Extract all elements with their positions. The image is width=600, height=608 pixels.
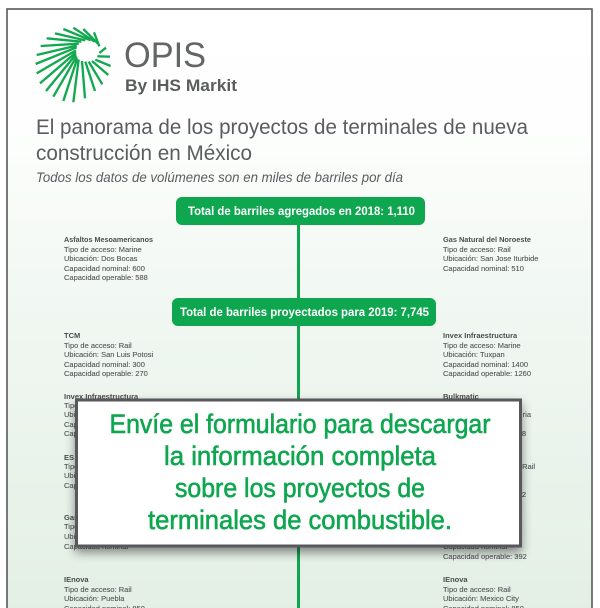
entry: IEnova Puebla: Tipo de acceso: Rail [64,585,132,594]
callout: download form message: Envíe el formulario para descargar [110,409,491,439]
entry: IEnova Mexico City: Tipo de acceso: Rail [443,585,511,594]
entry: Gas, partly covered [64,513,129,551]
callout: download form message [76,400,520,546]
entry: Invex Infraestructura Tuxpan: Tipo de acceso: Marine [443,341,521,350]
entry: Asfaltos Mesoamericanos: Tipo de acceso: Marine [64,245,142,254]
entry: right column middle, partly covered [522,462,535,499]
entry: right column middle, partly covered: 2 [522,490,526,499]
entry: ES, partly covered: Tipo [64,462,78,471]
callout: download form message: terminales de combustible. [148,505,452,535]
entry: right column lower, operable capacity: Capacidad nominal [443,542,508,551]
logo wordmark: OPIS: OPIS [124,36,206,75]
entry: Gas, partly covered: Ubicación [64,532,97,541]
entry: Bulkmatic, partly covered [443,392,532,438]
entry: IEnova Puebla: IEnova [64,575,89,584]
entry: Invex Infraestructura Tuxpan: Capacidad nominal: 1400 [443,360,528,369]
entry: Gas Natural del Noroeste: Capacidad nominal: 510 [443,264,524,273]
entry: Invex Infraestructura Tuxpan: Ubicación: Tuxpan [443,350,505,359]
entry: Invex Infraestructura, partly covered: Tipo [64,401,78,410]
entry: ES, partly covered: Capacidad [64,481,100,490]
title [36,116,528,165]
entry: Asfaltos Mesoamericanos: Asfaltos Mesoamericanos [64,235,153,244]
entry: IEnova Mexico City [443,575,524,608]
entry: Invex Infraestructura, partly covered: Invex Infraestructura [64,392,139,401]
pill: total 2019 [172,298,436,326]
entry: TCM: Capacidad operable: 270 [64,369,148,378]
entry: Invex Infraestructura Tuxpan [443,331,531,378]
entry: Bulkmatic, partly covered: ria [523,410,532,419]
entry: Gas Natural del Noroeste [443,235,538,273]
entry: Invex Infraestructura, partly covered: Ubicación [64,410,97,419]
entry: TCM: Ubicación: San Luis Potosi [64,350,154,359]
entry: Invex Infraestructura, partly covered: Capacidad [64,420,100,429]
entry: right column lower, operable capacity: Capacidad operable: 392 [443,552,527,561]
entry: right column middle, partly covered: Rail [522,462,535,471]
timeline line [297,222,300,608]
entry: Gas Natural del Noroeste: Tipo de acceso: Rail [443,245,511,254]
entry: Gas, partly covered: Gas [64,513,78,522]
logo tagline: By IHS Markit: By IHS Markit [125,76,237,95]
entry: TCM: Tipo de acceso: Rail [64,341,132,350]
entry: Bulkmatic, partly covered: 8 [522,429,526,438]
subtitle: Todos los datos de volúmenes son en miles de barriles por día [36,169,403,185]
pill: total 2018: Total de barriles agregados en 2018: 1,110 [188,206,415,218]
entry: Asfaltos Mesoamericanos: Capacidad nominal: 600 [64,264,145,273]
pill: total 2019: Total de barriles proyectados para 2019: 7,745 [180,307,430,319]
entry: IEnova Puebla: Ubicación: Puebla [64,594,125,603]
entry: Asfaltos Mesoamericanos [64,235,153,282]
entry: Invex Infraestructura, partly covered: Capacidad [64,429,100,438]
entry: IEnova Mexico City: IEnova [443,575,468,584]
entry: TCM [64,331,154,378]
entry: Gas Natural del Noroeste: Gas Natural del Noroeste [443,235,531,244]
icon: OPIS swirl logo [36,28,111,102]
entry: Bulkmatic, partly covered: Bulkmatic [443,392,479,401]
entry: Asfaltos Mesoamericanos: Ubicación: Dos Bocas [64,254,138,263]
callout: download form message: la información completa [164,441,437,471]
entry: ES, partly covered: Ubicación [64,471,97,480]
entry: TCM: Capacidad nominal: 300 [64,360,145,369]
entry: TCM: TCM [64,331,80,340]
entry: Gas Natural del Noroeste: Ubicación: San Jose Iturbide [443,254,538,263]
entry: Asfaltos Mesoamericanos: Capacidad operable: 588 [64,273,148,282]
title: construcción en México [36,142,252,165]
pill: total 2018 [176,197,425,225]
entry: ES, partly covered: ES [64,453,74,462]
entry: ES, partly covered [64,453,100,490]
title: El panorama de los proyectos de terminales de nueva [36,116,528,139]
entry: Invex Infraestructura Tuxpan: Invex Infraestructura [443,331,518,340]
entry: Invex Infraestructura, partly covered [64,392,139,438]
entry: right column lower, operable capacity [443,542,527,561]
callout: download form message: sobre los proyectos de [175,473,425,503]
entry: Gas, partly covered: Capacidad nominal [64,542,129,551]
entry: Gas, partly covered: Tipo [64,522,78,531]
entry: IEnova Puebla [64,575,145,608]
entry: Invex Infraestructura Tuxpan: Capacidad operable: 1260 [443,369,531,378]
entry: IEnova Mexico City: Ubicación: Mexico City [443,594,519,603]
